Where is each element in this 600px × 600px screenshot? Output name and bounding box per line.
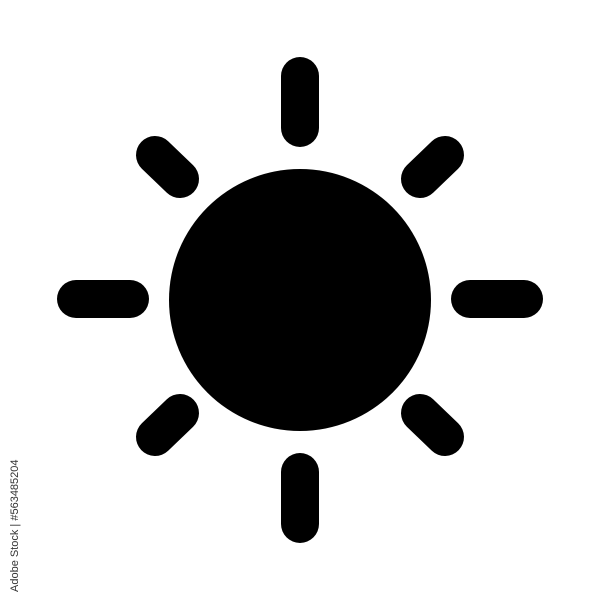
sun disc	[169, 169, 431, 431]
rays	[76, 76, 524, 524]
stock id text: Adobe Stock | #563485204	[9, 459, 21, 592]
